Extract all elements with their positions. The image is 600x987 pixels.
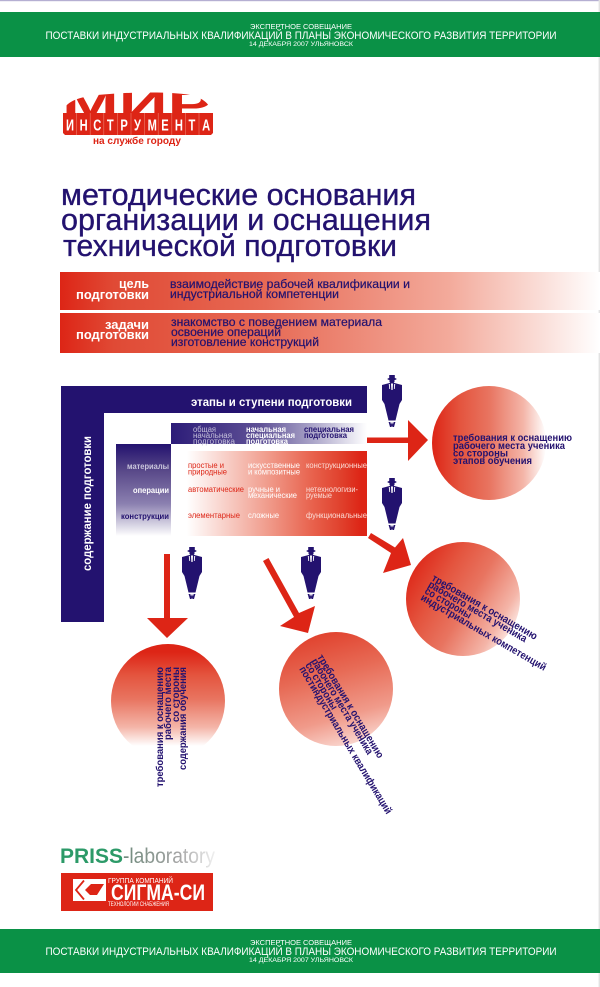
top banner: ПОСТАВКИ ИНДУСТРИАЛЬНЫХ КВАЛИФИКАЦИЙ В ПЛАНЫ ЭКОНОМИЧЕСКОГО РАЗВИТИЯ ТЕРРИТОРИИ — [46, 29, 556, 42]
circle: content requirements: требования к оснащению — [154, 667, 166, 787]
circle: competencies requirements: индустриальных компетенций — [418, 592, 548, 674]
bottom banner: ПОСТАВКИ ИНДУСТРИАЛЬНЫХ КВАЛИФИКАЦИЙ В ПЛАНЫ ЭКОНОМИЧЕСКОГО РАЗВИТИЯ ТЕРРИТОРИИ — [46, 945, 556, 958]
circle: competencies requirements — [406, 542, 548, 674]
panel: tasks of training — [60, 313, 600, 353]
circle: qualifications requirements: со стороны — [302, 660, 340, 712]
table header: training levels: специальная — [246, 431, 295, 440]
L-shaped frame: stages and training content — [61, 386, 367, 622]
table header: training levels: подготовка — [304, 431, 348, 440]
bottom banner — [0, 929, 600, 973]
top banner — [0, 12, 600, 57]
table header: training levels: начальная — [193, 431, 232, 440]
table body: gradient matrix: механические — [248, 491, 298, 500]
circle: content requirements: со стороны — [170, 667, 182, 722]
circle: qualifications requirements: рабочего места ученика — [308, 656, 375, 757]
table rows header: content: операции — [133, 486, 169, 495]
table header: training levels: специальная — [304, 425, 354, 434]
circle: competencies requirements: требования к оснащению — [430, 572, 539, 643]
bottom banner: ЭКСПЕРТНОЕ СОВЕЩАНИЕ — [250, 938, 352, 947]
bottom banner: 14 ДЕКАБРЯ 2007 УЛЬЯНОВСК — [249, 957, 353, 964]
title: методические основания — [61, 177, 416, 212]
table rows header: content: конструкции — [121, 512, 169, 521]
table body: gradient matrix: конструкционные — [306, 461, 368, 470]
panel: tasks of training: подготовки — [76, 328, 149, 342]
L-shaped frame: stages and training content: содержание подготовки — [82, 436, 94, 571]
circle: stages requirements: требования к оснащению — [453, 432, 572, 444]
panel: tasks of training: освоение операций — [171, 327, 281, 339]
logo: PRISS-laboratory: PRISS — [60, 845, 123, 868]
icon: person 1 — [382, 375, 402, 427]
panel: goal of training — [60, 272, 600, 310]
table body: gradient matrix: простые и — [188, 461, 224, 470]
table body: gradient matrix — [171, 451, 368, 536]
panel: goal of training: цель — [119, 277, 149, 291]
table header: training levels: подготовка — [193, 437, 236, 446]
table body: gradient matrix: нетехнологизи- — [306, 485, 358, 494]
icon: Sigma emblem — [73, 879, 106, 901]
circle: stages requirements: со стороны — [453, 448, 508, 460]
panel: tasks of training: задачи — [105, 318, 149, 332]
logo: Мир инструмента — [63, 92, 213, 146]
table body: gradient matrix: ручные и — [248, 485, 280, 494]
top banner: 14 ДЕКАБРЯ 2007 УЛЬЯНОВСК — [249, 41, 353, 48]
icon: person 3 — [182, 547, 202, 599]
logo: Мир инструмента: ИНСТРУМЕНТА — [66, 117, 210, 134]
logo: Sigma-SI — [61, 873, 213, 911]
table body: gradient matrix: природные — [188, 468, 228, 476]
logo: PRISS-laboratory: -laboratory — [123, 845, 215, 868]
title: организации и оснащения — [61, 202, 431, 237]
logo: Мир инструмента: на службе городу — [93, 135, 181, 147]
circle: qualifications requirements: постиндустриальных квалификаций — [296, 664, 394, 816]
panel: tasks of training: изготовление конструкций — [171, 337, 319, 349]
circle: content requirements — [111, 644, 225, 787]
logo: Мир инструмента: МИР — [62, 83, 213, 127]
table rows header: content — [116, 444, 171, 536]
table body: gradient matrix: и композитные — [248, 468, 301, 476]
table body: gradient matrix: сложные — [248, 511, 280, 520]
icon: person 4 — [301, 547, 321, 599]
table body: gradient matrix: автоматические — [188, 485, 245, 494]
circle: qualifications requirements — [279, 632, 394, 816]
table body: gradient matrix: искусственные — [248, 461, 301, 470]
panel: goal of training: подготовки — [76, 288, 149, 302]
circle: stages requirements: этапов обучения — [453, 455, 532, 467]
title: технической подготовки — [63, 228, 397, 263]
arrow: to stages circle — [367, 420, 428, 461]
circle: competencies requirements: со стороны — [422, 585, 474, 622]
circle: competencies requirements: рабочего места ученика — [426, 579, 529, 645]
table body: gradient matrix: элементарные — [188, 511, 241, 520]
table header: training levels: начальная — [246, 425, 286, 434]
top banner: ЭКСПЕРТНОЕ СОВЕЩАНИЕ — [250, 22, 352, 31]
table header: training levels: подготовка — [246, 437, 289, 446]
circle: qualifications requirements: требования к оснащению — [314, 652, 386, 761]
table body: gradient matrix: руемые — [306, 491, 333, 500]
logo: Sigma-SI: ГРУППА КОМПАНИЙ — [108, 876, 173, 885]
arrow: to content circle — [147, 554, 188, 638]
logo: Sigma-SI: ТЕХНОЛОГИИ СНАБЖЕНИЯ — [108, 902, 169, 908]
panel: goal of training: индустриальной компетенции — [170, 289, 339, 301]
circle: content requirements: рабочего места — [162, 667, 174, 740]
circle: stages requirements: рабочего места ученика — [453, 440, 565, 452]
circle: content requirements: содержания обучения — [177, 667, 189, 770]
circle: stages requirements — [432, 386, 572, 500]
table header: training levels: общая — [193, 425, 216, 434]
arrow: to qualifications circle — [263, 558, 315, 633]
table body: gradient matrix: функциональные — [306, 511, 368, 520]
table header: training levels — [171, 423, 367, 446]
icon: person 2 — [382, 478, 402, 530]
arrow: to competencies circle — [368, 533, 411, 573]
panel: tasks of training: знакомство с поведением материала — [171, 317, 383, 329]
L-shaped frame: stages and training content: этапы и ступени подготовки — [191, 397, 352, 409]
logo: Sigma-SI: СИГМА-СИ — [111, 880, 205, 905]
title — [61, 177, 431, 263]
panel: goal of training: взаимодействие рабочей квалификации и — [170, 279, 410, 291]
table rows header: content: материалы — [127, 462, 169, 471]
logo: PRISS-laboratory — [60, 845, 215, 868]
